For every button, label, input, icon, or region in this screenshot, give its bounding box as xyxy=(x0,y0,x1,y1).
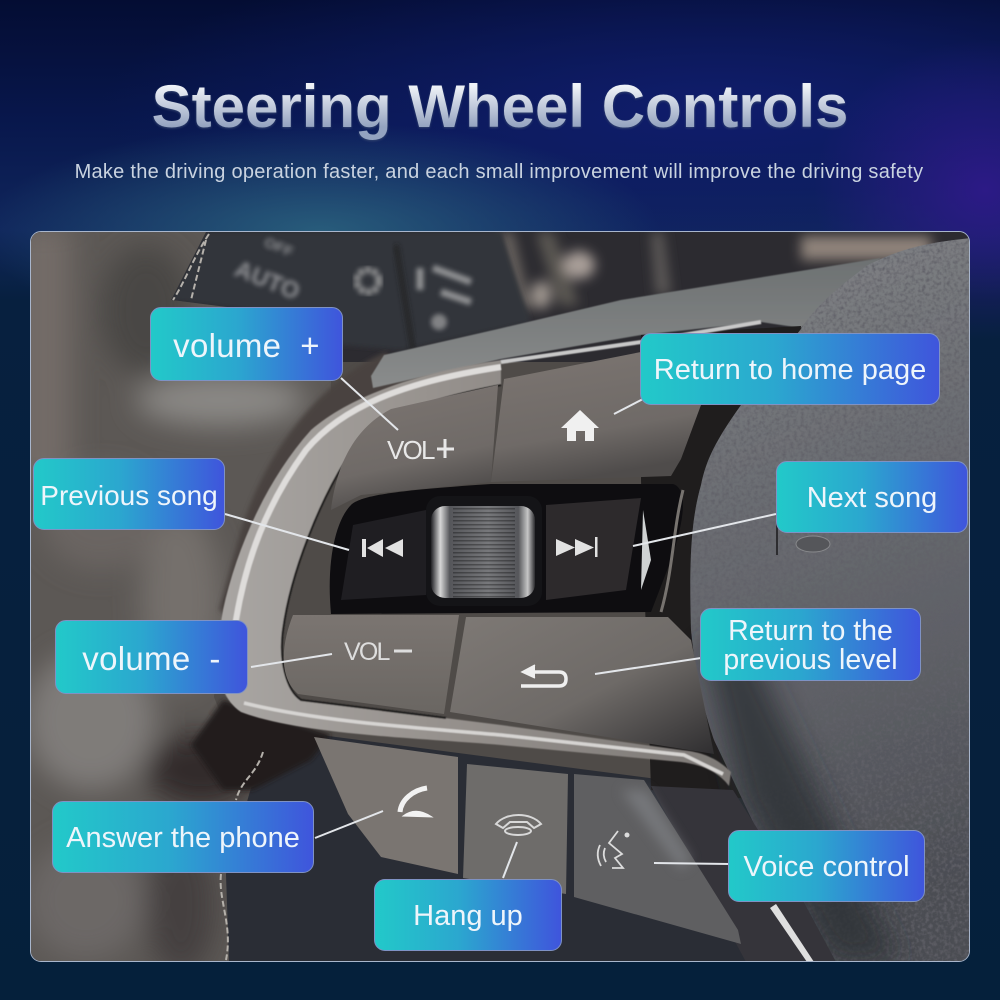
label: voice control: Voice control xyxy=(743,851,910,883)
right textured wheel xyxy=(690,238,971,962)
answer button xyxy=(314,737,458,874)
icon: back arrow xyxy=(521,665,566,686)
icon: home xyxy=(561,410,599,441)
back button xyxy=(450,617,714,754)
icon: minus xyxy=(394,650,412,652)
label: return to previous level xyxy=(700,608,921,681)
label: volume + xyxy=(150,307,343,381)
label: return to home page: Return to home page xyxy=(654,354,926,386)
label: hang up xyxy=(374,879,562,951)
panel: steering wheel photo xyxy=(30,231,970,962)
dark brown trim xyxy=(219,352,401,620)
label: hang up: Hang up xyxy=(413,900,523,932)
VOL- text: VOL xyxy=(344,638,391,666)
VOL+ text: VOL xyxy=(387,435,435,465)
wheel shadow and highlights xyxy=(701,640,901,962)
label: volume +: volume + xyxy=(173,326,320,364)
subtitle: Make the driving operation faster, and each small improvement will improve the driving safety xyxy=(75,161,923,183)
label: voice control xyxy=(728,830,925,902)
label: next song xyxy=(776,461,968,533)
label: previous song xyxy=(33,458,225,530)
label: return to previous level: Return to the xyxy=(728,615,893,647)
stitching xyxy=(173,234,263,960)
volume down button xyxy=(284,615,459,714)
scroll wheel knob xyxy=(426,496,542,606)
label: return to home page xyxy=(640,333,940,405)
icon: voice xyxy=(598,831,630,868)
home button xyxy=(491,345,723,482)
icon: hang up xyxy=(496,815,541,835)
blurred light stalk: AUTO xyxy=(231,256,304,306)
label: volume - xyxy=(55,620,248,694)
label: next song: Next song xyxy=(807,482,937,514)
icon: answer xyxy=(400,788,432,817)
upper rim band xyxy=(371,258,881,388)
icon: next track xyxy=(556,537,598,557)
voice button sheen xyxy=(621,790,691,870)
voice button xyxy=(574,774,741,944)
center black control xyxy=(330,484,683,614)
dashboard background xyxy=(31,232,971,362)
blurred light stalk xyxy=(171,232,531,350)
dark gap behind buttons xyxy=(641,326,801,800)
label: volume -: volume - xyxy=(82,640,221,676)
pointer lines xyxy=(225,378,776,878)
left leather wheel xyxy=(16,225,331,975)
title: Steering Wheel Controls xyxy=(152,73,848,140)
label: answer the phone xyxy=(52,801,314,873)
dark lower area xyxy=(226,735,851,962)
lower spoke and chrome strip xyxy=(651,786,836,962)
label: previous song: Previous song xyxy=(40,480,218,510)
icon: previous track xyxy=(362,539,403,557)
title xyxy=(0,69,1000,145)
blurred light stalk: OFF xyxy=(262,234,296,261)
hang up button xyxy=(463,764,568,894)
icon: plus xyxy=(437,439,454,458)
volume up button xyxy=(331,385,498,510)
label: return to previous level: previous level xyxy=(723,644,898,676)
label: answer the phone: Answer the phone xyxy=(66,822,300,854)
chrome trim xyxy=(218,322,761,786)
small switch on wheel xyxy=(777,520,830,555)
